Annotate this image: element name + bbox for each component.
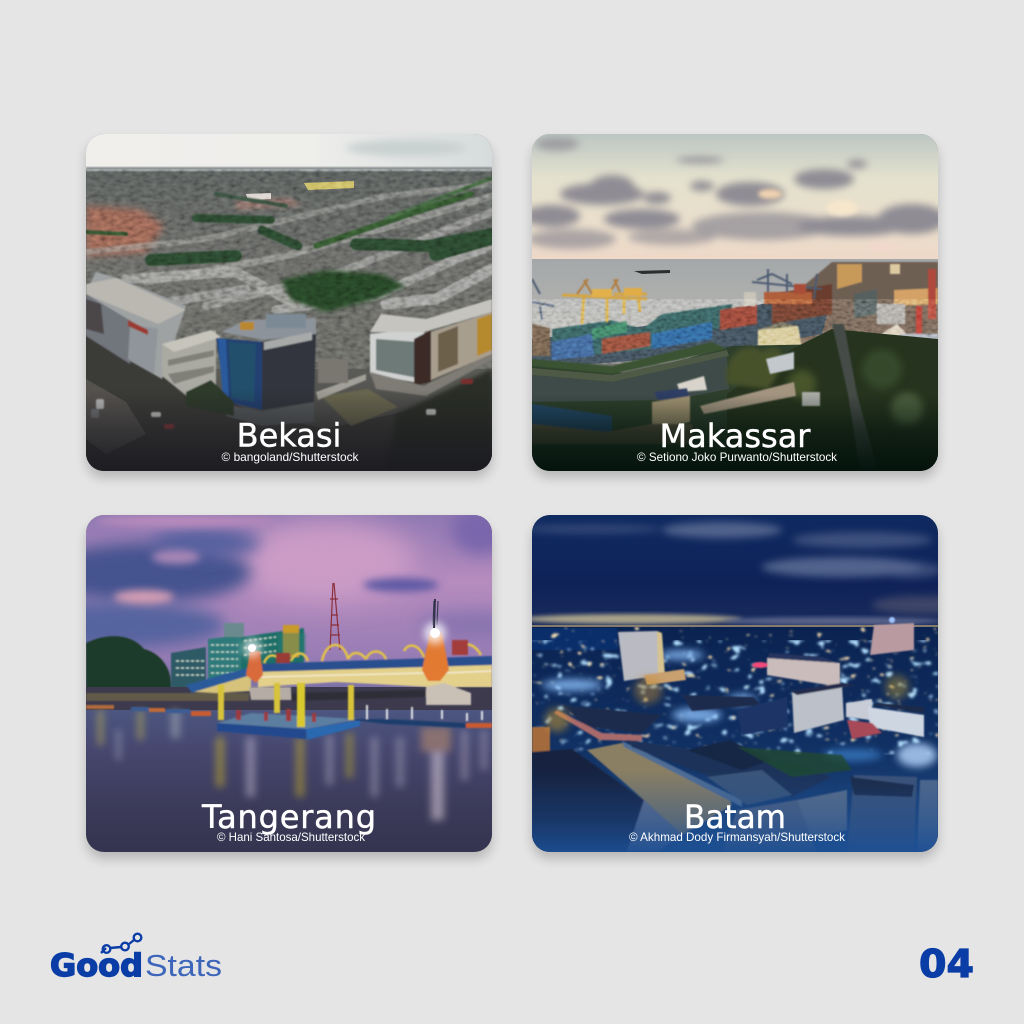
logo: GoodStats (50, 932, 222, 982)
panel: Batam photo card (532, 515, 938, 852)
city name: Makassar: Makassar (660, 417, 811, 455)
icon: rising line chart (101, 934, 141, 953)
city name: Batam: Batam (684, 798, 786, 836)
city name: Tangerang: Tangerang (201, 798, 376, 836)
photo credit: Makassar: © Setiono Joko Purwanto/Shutterstock (637, 450, 838, 464)
city name: Bekasi: Bekasi (237, 416, 341, 454)
panel: Tangerang photo card (86, 515, 492, 852)
panel: Makassar photo card (532, 134, 938, 471)
panel: Bekasi photo card (86, 134, 492, 471)
photo credit: Batam: © Akhmad Dody Firmansyah/Shutterstock (629, 830, 846, 844)
photo credit: Bekasi: © bangoland/Shutterstock (222, 450, 359, 464)
photo credit: Tangerang: © Hani Santosa/Shutterstock (217, 830, 366, 844)
wordmark: Stats: Stats (145, 948, 222, 982)
